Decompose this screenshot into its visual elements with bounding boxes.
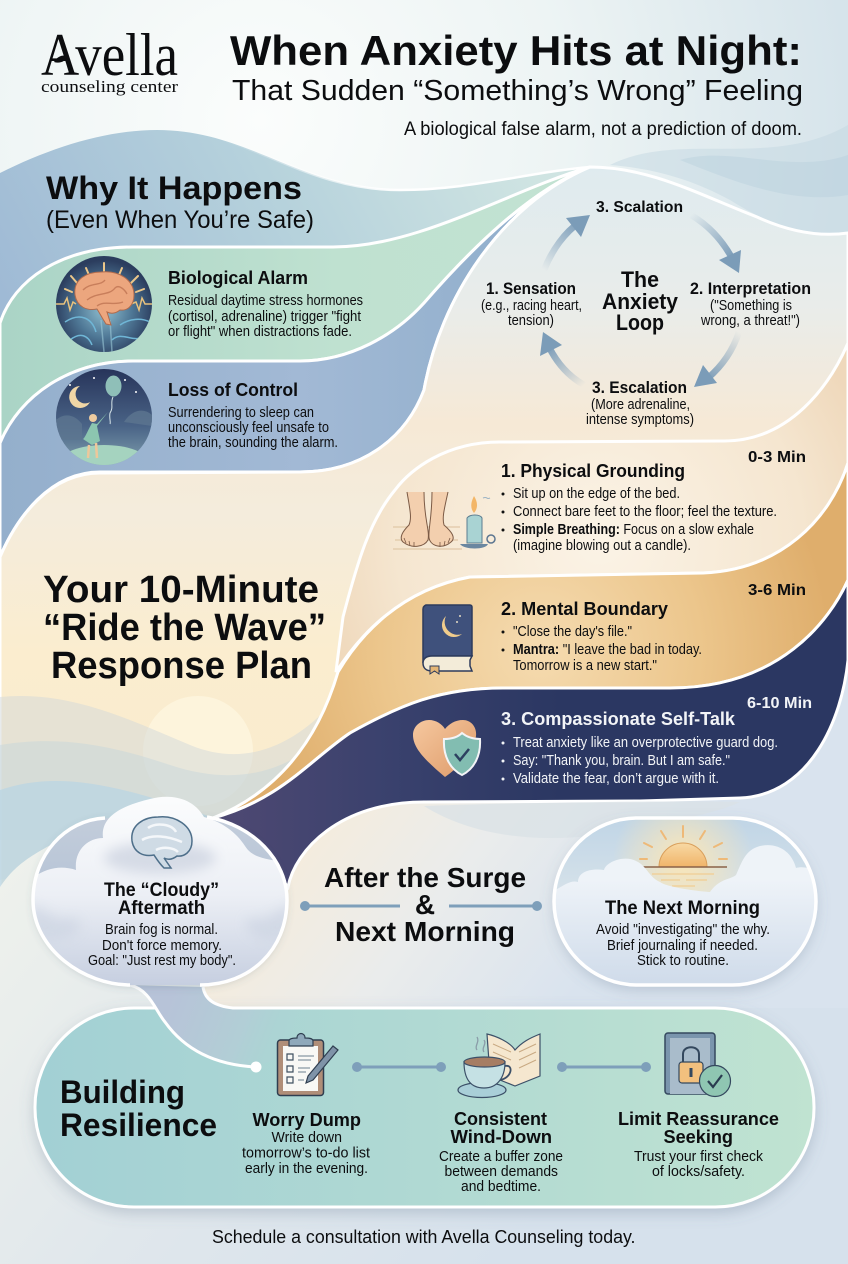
logo: avella counseling center: Avella xyxy=(41,22,178,88)
step: sensation: 1. Sensation xyxy=(486,279,576,298)
icon: foggy brain xyxy=(132,817,192,868)
illustration: sunrise over waves xyxy=(0,696,335,1264)
text: biological alarm body xyxy=(168,292,363,340)
list: self-talk steps: Treat anxiety like an overprotective guard dog. xyxy=(513,734,778,751)
connector: cloud to heading xyxy=(300,901,400,911)
step: worry dump: tomorrow’s to-do list xyxy=(242,1146,370,1162)
heading: cloudy aftermath xyxy=(104,880,219,919)
list: physical grounding steps xyxy=(502,485,777,554)
panel: after the surge background xyxy=(203,660,848,1008)
text: biological alarm body: Residual daytime stress hormones xyxy=(168,292,363,309)
heading: your 10-minute response plan xyxy=(43,569,326,687)
text: biological alarm body: or flight" when distractions fade. xyxy=(168,323,352,340)
step: sensation: (e.g., racing heart, xyxy=(481,297,582,314)
heading: your 10-minute response plan: Response Plan xyxy=(51,645,312,687)
list: mental boundary steps: "Close the day's file." xyxy=(513,623,632,640)
arrow: interpretation to escalation xyxy=(694,332,739,387)
list: self-talk steps xyxy=(502,734,778,787)
text: cloudy aftermath body: Brain fog is normal. xyxy=(105,921,218,938)
heading: why it happens: Why It Happens xyxy=(46,170,302,206)
step: scalation: 3. Scalation xyxy=(596,199,683,216)
icon: bare feet and candle xyxy=(393,492,495,549)
step: interpretation: wrong, a threat!") xyxy=(700,312,800,329)
connector: clipboard to cup xyxy=(352,1062,446,1072)
tagline: A biological false alarm, not a prediction of doom. xyxy=(404,118,802,140)
step: limit reassurance seeking: of locks/safety. xyxy=(652,1164,745,1180)
icon: child releasing balloon at night xyxy=(56,369,152,465)
list: self-talk steps: Validate the fear, don’t argue with it. xyxy=(513,770,719,787)
heading: why it happens: (Even When You’re Safe) xyxy=(46,206,314,234)
footer call to action: Schedule a consultation with Avella Counseling today. xyxy=(212,1227,636,1247)
clouds xyxy=(550,845,820,990)
heading: after the surge and next morning: Next Morning xyxy=(335,916,515,947)
heading: mental boundary: 2. Mental Boundary xyxy=(501,598,669,619)
step: interpretation xyxy=(690,279,811,329)
step: consistent wind-down xyxy=(439,1109,563,1195)
text: loss of control body: the brain, sounding the alarm. xyxy=(168,434,338,451)
step: worry dump: Write down xyxy=(272,1130,342,1146)
heading: the anxiety loop: Anxiety xyxy=(602,289,679,314)
step: limit reassurance seeking xyxy=(618,1109,779,1180)
icon: night book xyxy=(423,605,472,674)
panel: anxiety loop and response plan background xyxy=(0,167,848,900)
arrow: escalation to sensation xyxy=(540,332,584,385)
step: consistent wind-down: Create a buffer zone xyxy=(439,1149,563,1165)
step: worry dump xyxy=(242,1110,370,1177)
step: sensation: tension) xyxy=(508,312,554,329)
list: mental boundary steps: Mantra: "I leave the bad in today. xyxy=(513,641,702,658)
step: consistent wind-down: between demands xyxy=(444,1164,558,1180)
heading: why it happens xyxy=(46,170,314,234)
text: next morning body: Avoid "investigating" the why. xyxy=(596,921,770,938)
dot: tail end xyxy=(250,1062,262,1072)
panel: next morning xyxy=(550,800,820,990)
icon: tea cup and open book xyxy=(458,1034,540,1098)
text: loss of control body: unconsciously feel unsafe to xyxy=(168,419,329,436)
step: sensation xyxy=(481,279,582,329)
time label: 0-3 min: 0-3 Min xyxy=(748,449,806,466)
text: cloudy aftermath body: Don't force memory. xyxy=(102,937,222,954)
panel: loss of control band xyxy=(0,167,590,557)
panel: cloudy aftermath bubble xyxy=(25,797,295,995)
step: interpretation: 2. Interpretation xyxy=(690,279,811,298)
panel: mental boundary band xyxy=(213,463,848,818)
icon: padlock on door with check xyxy=(665,1033,730,1096)
heading: biological alarm: Biological Alarm xyxy=(168,267,308,288)
step: consistent wind-down: Consistent xyxy=(454,1109,547,1129)
step: escalation: 3. Escalation xyxy=(592,378,687,397)
text: next morning body: Brief journaling if needed. xyxy=(607,937,758,954)
panel: building resilience xyxy=(35,985,814,1207)
text: biological alarm body: (cortisol, adrenaline) trigger "fight xyxy=(168,308,362,325)
time label: 6-10 min: 6-10 Min xyxy=(747,695,812,712)
arrow: scalation to interpretation xyxy=(691,215,741,273)
icon: glowing brain xyxy=(56,256,152,352)
text: loss of control body xyxy=(168,404,338,451)
heading: the anxiety loop: The xyxy=(621,267,659,292)
step: consistent wind-down: and bedtime. xyxy=(461,1179,541,1195)
step: limit reassurance seeking: Seeking xyxy=(664,1127,733,1147)
text: loss of control body: Surrendering to sleep can xyxy=(168,404,314,421)
list: physical grounding steps: Simple Breathing: Focus on a slow exhale xyxy=(513,521,754,538)
list: mental boundary steps: Tomorrow is a new start." xyxy=(513,657,657,674)
step: worry dump: early in the evening. xyxy=(245,1161,368,1177)
step: interpretation: ("Something is xyxy=(710,297,792,314)
heading: physical grounding: 1. Physical Grounding xyxy=(501,460,685,481)
text: next morning body: Stick to routine. xyxy=(637,952,729,969)
text: next morning body xyxy=(596,921,770,969)
subtitle: That Sudden “Something’s Wrong” Feeling xyxy=(232,75,803,107)
heading: building resilience: Building xyxy=(60,1074,185,1110)
panel: biological alarm band xyxy=(0,167,590,443)
heading: your 10-minute response plan: Your 10-Minute xyxy=(43,569,319,611)
tail of cloud bubble xyxy=(130,985,330,1067)
text: cloudy aftermath body xyxy=(88,921,236,969)
heading: cloudy aftermath: Aftermath xyxy=(118,898,205,919)
step: worry dump: Worry Dump xyxy=(252,1110,361,1130)
icon: clipboard and pen xyxy=(278,1034,338,1096)
panel: compassionate self-talk band xyxy=(213,580,848,887)
connector: heading to morning xyxy=(449,901,542,911)
list: mental boundary steps xyxy=(502,623,702,674)
heading: the anxiety loop xyxy=(602,267,679,335)
step: escalation: (More adrenaline, xyxy=(591,396,690,413)
step: limit reassurance seeking: Trust your first check xyxy=(634,1149,764,1165)
time label: 3-6 min: 3-6 Min xyxy=(748,582,806,599)
connector: cup to lock xyxy=(557,1062,651,1072)
heading: compassionate self-talk: 3. Compassionate Self-Talk xyxy=(501,708,736,729)
heading: cloudy aftermath: The “Cloudy” xyxy=(104,880,219,901)
icon: heart with shield xyxy=(413,720,480,777)
panel: physical grounding band xyxy=(336,343,848,672)
heading: after the surge and next morning xyxy=(324,862,526,947)
heading: after the surge and next morning: After the Surge xyxy=(324,862,526,893)
icon: sunrise xyxy=(640,826,727,886)
text: cloudy aftermath body: Goal: "Just rest my body". xyxy=(88,952,236,969)
heading: loss of control: Loss of Control xyxy=(168,379,298,400)
list: physical grounding steps: Sit up on the edge of the bed. xyxy=(513,485,680,502)
heading: building resilience xyxy=(60,1074,217,1143)
step: limit reassurance seeking: Limit Reassurance xyxy=(618,1109,779,1129)
panel: why it happens band xyxy=(0,130,590,600)
soft wave behind after the surge xyxy=(424,801,740,838)
step: escalation xyxy=(586,378,694,428)
heading: the next morning: The Next Morning xyxy=(605,898,760,919)
title: When Anxiety Hits at Night: xyxy=(230,27,802,74)
tail outlines xyxy=(130,985,330,1067)
logo: avella counseling center: counseling center xyxy=(41,77,178,96)
heading: your 10-minute response plan: “Ride the Wave” xyxy=(43,607,326,649)
list: physical grounding steps: Connect bare feet to the floor; feel the texture. xyxy=(513,503,777,520)
step: escalation: intense symptoms) xyxy=(586,411,694,428)
arrow: sensation to scalation xyxy=(544,215,590,270)
diagram: the anxiety loop xyxy=(481,199,811,428)
heading: building resilience: Resilience xyxy=(60,1107,217,1143)
list: physical grounding steps: (imagine blowing out a candle). xyxy=(513,537,691,554)
heading: the anxiety loop: Loop xyxy=(616,310,664,335)
heading: after the surge and next morning: & xyxy=(415,889,435,920)
step: consistent wind-down: Wind-Down xyxy=(450,1127,552,1147)
list: self-talk steps: Say: "Thank you, brain. But I am safe." xyxy=(513,752,730,769)
